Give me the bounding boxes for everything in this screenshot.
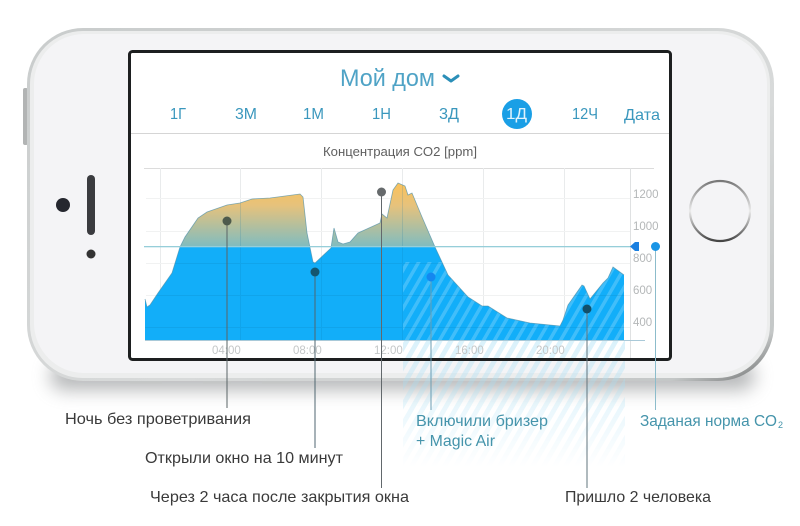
icon: speaker [87, 175, 95, 235]
phone body [27, 28, 774, 381]
callout: night [65, 216, 251, 428]
y axis labels: 1200 [633, 189, 659, 201]
callout: window opened [145, 268, 344, 467]
phone [23, 28, 774, 390]
x axis labels [212, 345, 565, 357]
callout: co2 norm: 2 [778, 420, 783, 430]
callout: two people: Пришло 2 человека [565, 489, 711, 506]
icon: chevron [444, 76, 458, 81]
icon: home button [690, 181, 750, 241]
y axis labels: 600 [633, 285, 652, 297]
grid over area [145, 185, 624, 340]
heading: my home: Мой дом [340, 65, 435, 92]
callout: breather on [416, 272, 548, 450]
y axis labels: 800 [633, 253, 652, 265]
x axis labels: 04:00 [212, 345, 241, 357]
icon: camera [56, 198, 70, 212]
hatch below chart [403, 341, 625, 444]
callout: window opened: Открыли окно на 10 минут [145, 450, 344, 467]
x axis labels: 08:00 [293, 345, 322, 357]
y axis labels: 400 [633, 317, 652, 329]
phone shadow [50, 362, 755, 390]
co2 chart [144, 168, 659, 468]
chart area outline [145, 183, 624, 326]
callout: co2 norm: Заданая норма CO [640, 413, 777, 430]
norm marker [630, 242, 639, 251]
baseline [145, 340, 645, 341]
range tabs: 12Ч [572, 106, 598, 123]
screen background [130, 52, 671, 359]
chart hatch: breather on [403, 262, 625, 341]
x axis labels: 16:00 [455, 345, 484, 357]
y axis labels [633, 189, 659, 329]
range tabs: 1Н [372, 106, 391, 123]
range tabs: 3Д [439, 106, 459, 123]
norm line [144, 246, 639, 247]
range tabs: Дата [624, 107, 660, 124]
range tabs: 3М [235, 106, 257, 123]
callout: co2 norm [640, 242, 783, 430]
y axis labels: 1000 [633, 221, 659, 233]
callout: breather on: + Magic Air [416, 433, 496, 450]
chart area: above norm [180, 183, 434, 246]
x axis labels: 20:00 [536, 345, 565, 357]
range tabs: 1Д [506, 106, 527, 123]
range tabs: 1Г [170, 106, 186, 123]
callout: breather on: Включили бризер [416, 413, 548, 430]
x axis labels: 12:00 [374, 345, 403, 357]
screen bezel [130, 52, 670, 360]
chart title: Концентрация CO2 [ppm] [323, 144, 477, 159]
icon: sensor [86, 250, 96, 258]
range tabs: 1М [303, 106, 324, 123]
callout: after closing window [150, 188, 409, 506]
callout: two people [565, 304, 711, 506]
chart header [131, 65, 670, 159]
callout: after closing window: Через 2 часа после закрытия окна [150, 489, 409, 506]
range tabs [170, 99, 660, 129]
callout: night: Ночь без проветривания [65, 411, 251, 428]
side buttons [23, 88, 290, 384]
chart area: below norm [145, 247, 625, 341]
